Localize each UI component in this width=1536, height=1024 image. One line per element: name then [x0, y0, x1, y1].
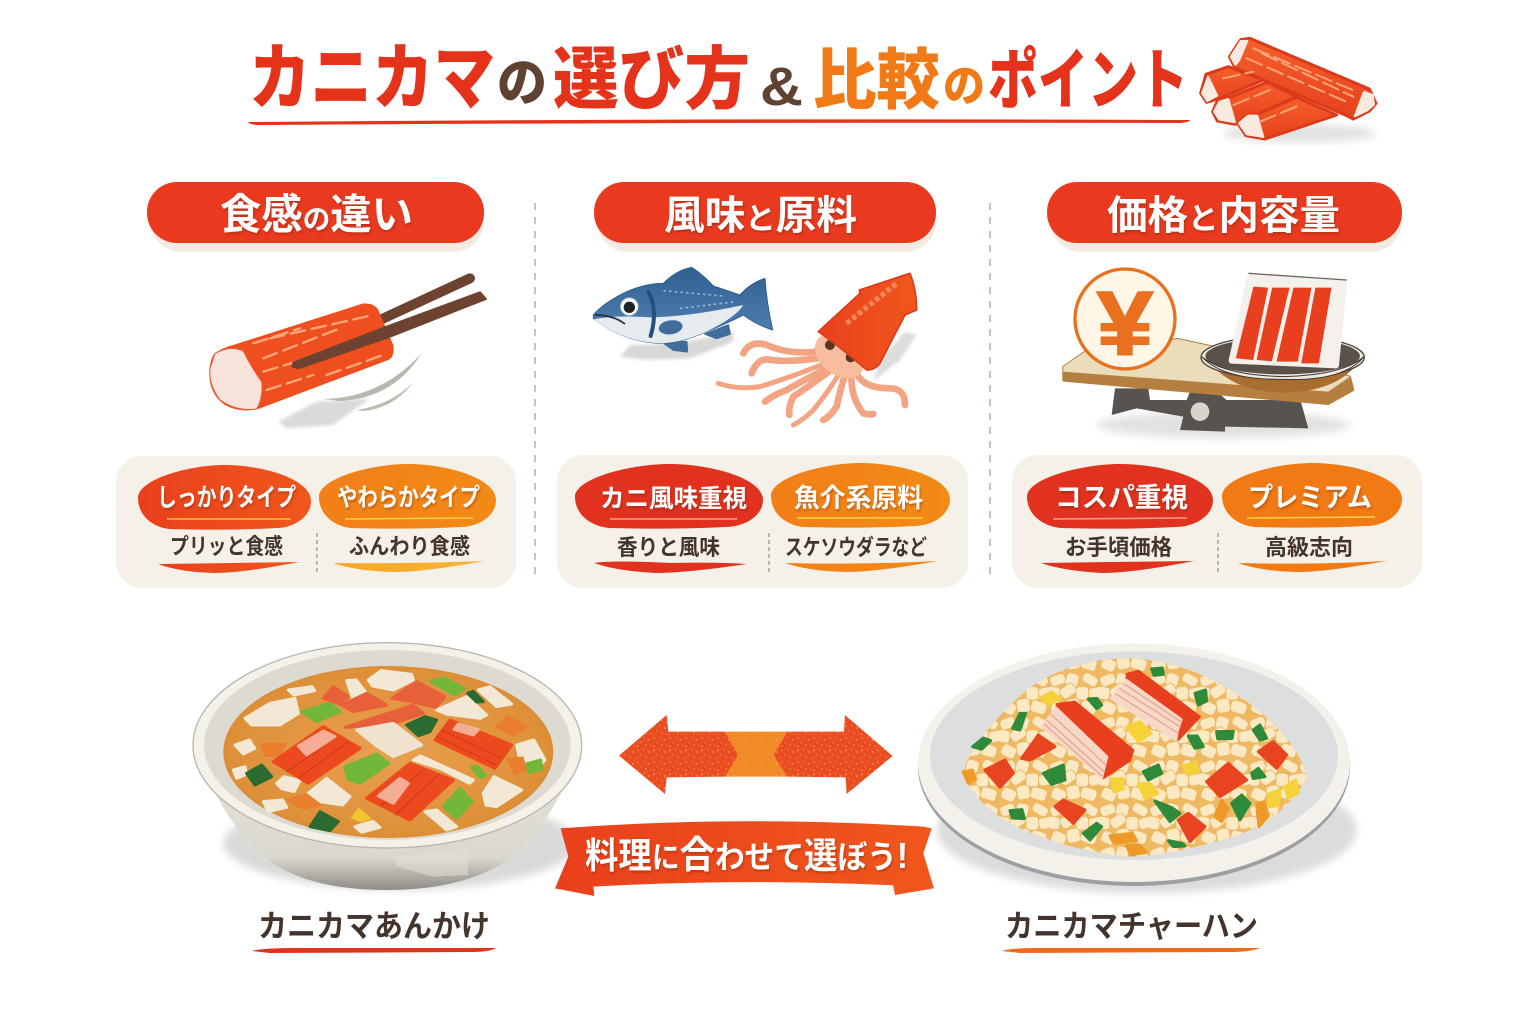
- comparison card: price: [1012, 455, 1422, 588]
- option: premium: 高級志向: [1265, 535, 1353, 560]
- title: [248, 39, 1190, 125]
- option: crab flavor focus: [575, 464, 763, 573]
- heading: flavor: 風味と原料: [664, 194, 857, 238]
- icon: crab stick with chopsticks: [209, 278, 486, 428]
- option: value focus: お手頃価格: [1065, 535, 1172, 560]
- title: ポイント: [988, 43, 1188, 117]
- option: firm type: しっかりタイプ: [157, 484, 296, 512]
- label: ankake: カニカマあんかけ: [258, 909, 490, 944]
- title: &: [760, 57, 803, 117]
- icon: squid: [718, 273, 917, 425]
- dish: crab stick fried rice plate: [918, 643, 1357, 893]
- heading: texture: [147, 182, 484, 252]
- comparison card: flavor: [557, 455, 968, 588]
- title: 選び方: [553, 42, 750, 118]
- heading: price: [1047, 182, 1402, 252]
- banner: choose by dish: [555, 821, 934, 896]
- title: の: [497, 55, 547, 113]
- title: の: [943, 62, 985, 111]
- option: seafood ingredients: [771, 463, 950, 572]
- icon: crab sticks beside title: [1201, 38, 1377, 143]
- comparison card: texture: [116, 456, 516, 588]
- option: premium: プレミアム: [1248, 483, 1372, 513]
- option: soft type: やわらかタイプ: [337, 484, 480, 512]
- option: soft type: ふんわり食感: [349, 534, 470, 559]
- option: value focus: コスパ重視: [1055, 483, 1188, 513]
- double arrow: [619, 715, 893, 794]
- option: premium: [1222, 463, 1402, 572]
- option: crab flavor focus: カニ風味重視: [600, 485, 747, 513]
- divider left: [534, 203, 536, 578]
- banner: choose by dish: 料理に合わせて選ぼう!: [585, 835, 908, 877]
- option: soft type: [319, 464, 496, 572]
- option: seafood ingredients: スケソウダラなど: [785, 535, 927, 560]
- divider right: [989, 203, 991, 578]
- label: fried rice: カニカマチャーハン: [1005, 909, 1258, 944]
- title: カニカマ: [249, 39, 495, 119]
- title: 比較: [813, 43, 940, 117]
- icon: fish: [593, 267, 773, 360]
- option: firm type: プリッと食感: [170, 534, 283, 559]
- icon: scale with yen coin and crab stick pack: [1063, 269, 1364, 438]
- option: value focus: [1027, 464, 1213, 573]
- option: firm type: [138, 465, 311, 573]
- heading: texture: 食感の違い: [220, 191, 413, 238]
- heading: flavor: [594, 182, 936, 252]
- option: seafood ingredients: 魚介系原料: [794, 483, 923, 513]
- panel: flavor: [593, 182, 936, 425]
- icon: scale with yen coin and crab stick pack: ¥: [1097, 275, 1153, 375]
- heading: price: 価格と内容量: [1107, 194, 1340, 238]
- option: crab flavor focus: 香りと風味: [617, 535, 720, 560]
- panel: price: [1047, 182, 1402, 438]
- dish: crab stick ankake bowl: [193, 643, 582, 890]
- panel: texture: [147, 182, 486, 428]
